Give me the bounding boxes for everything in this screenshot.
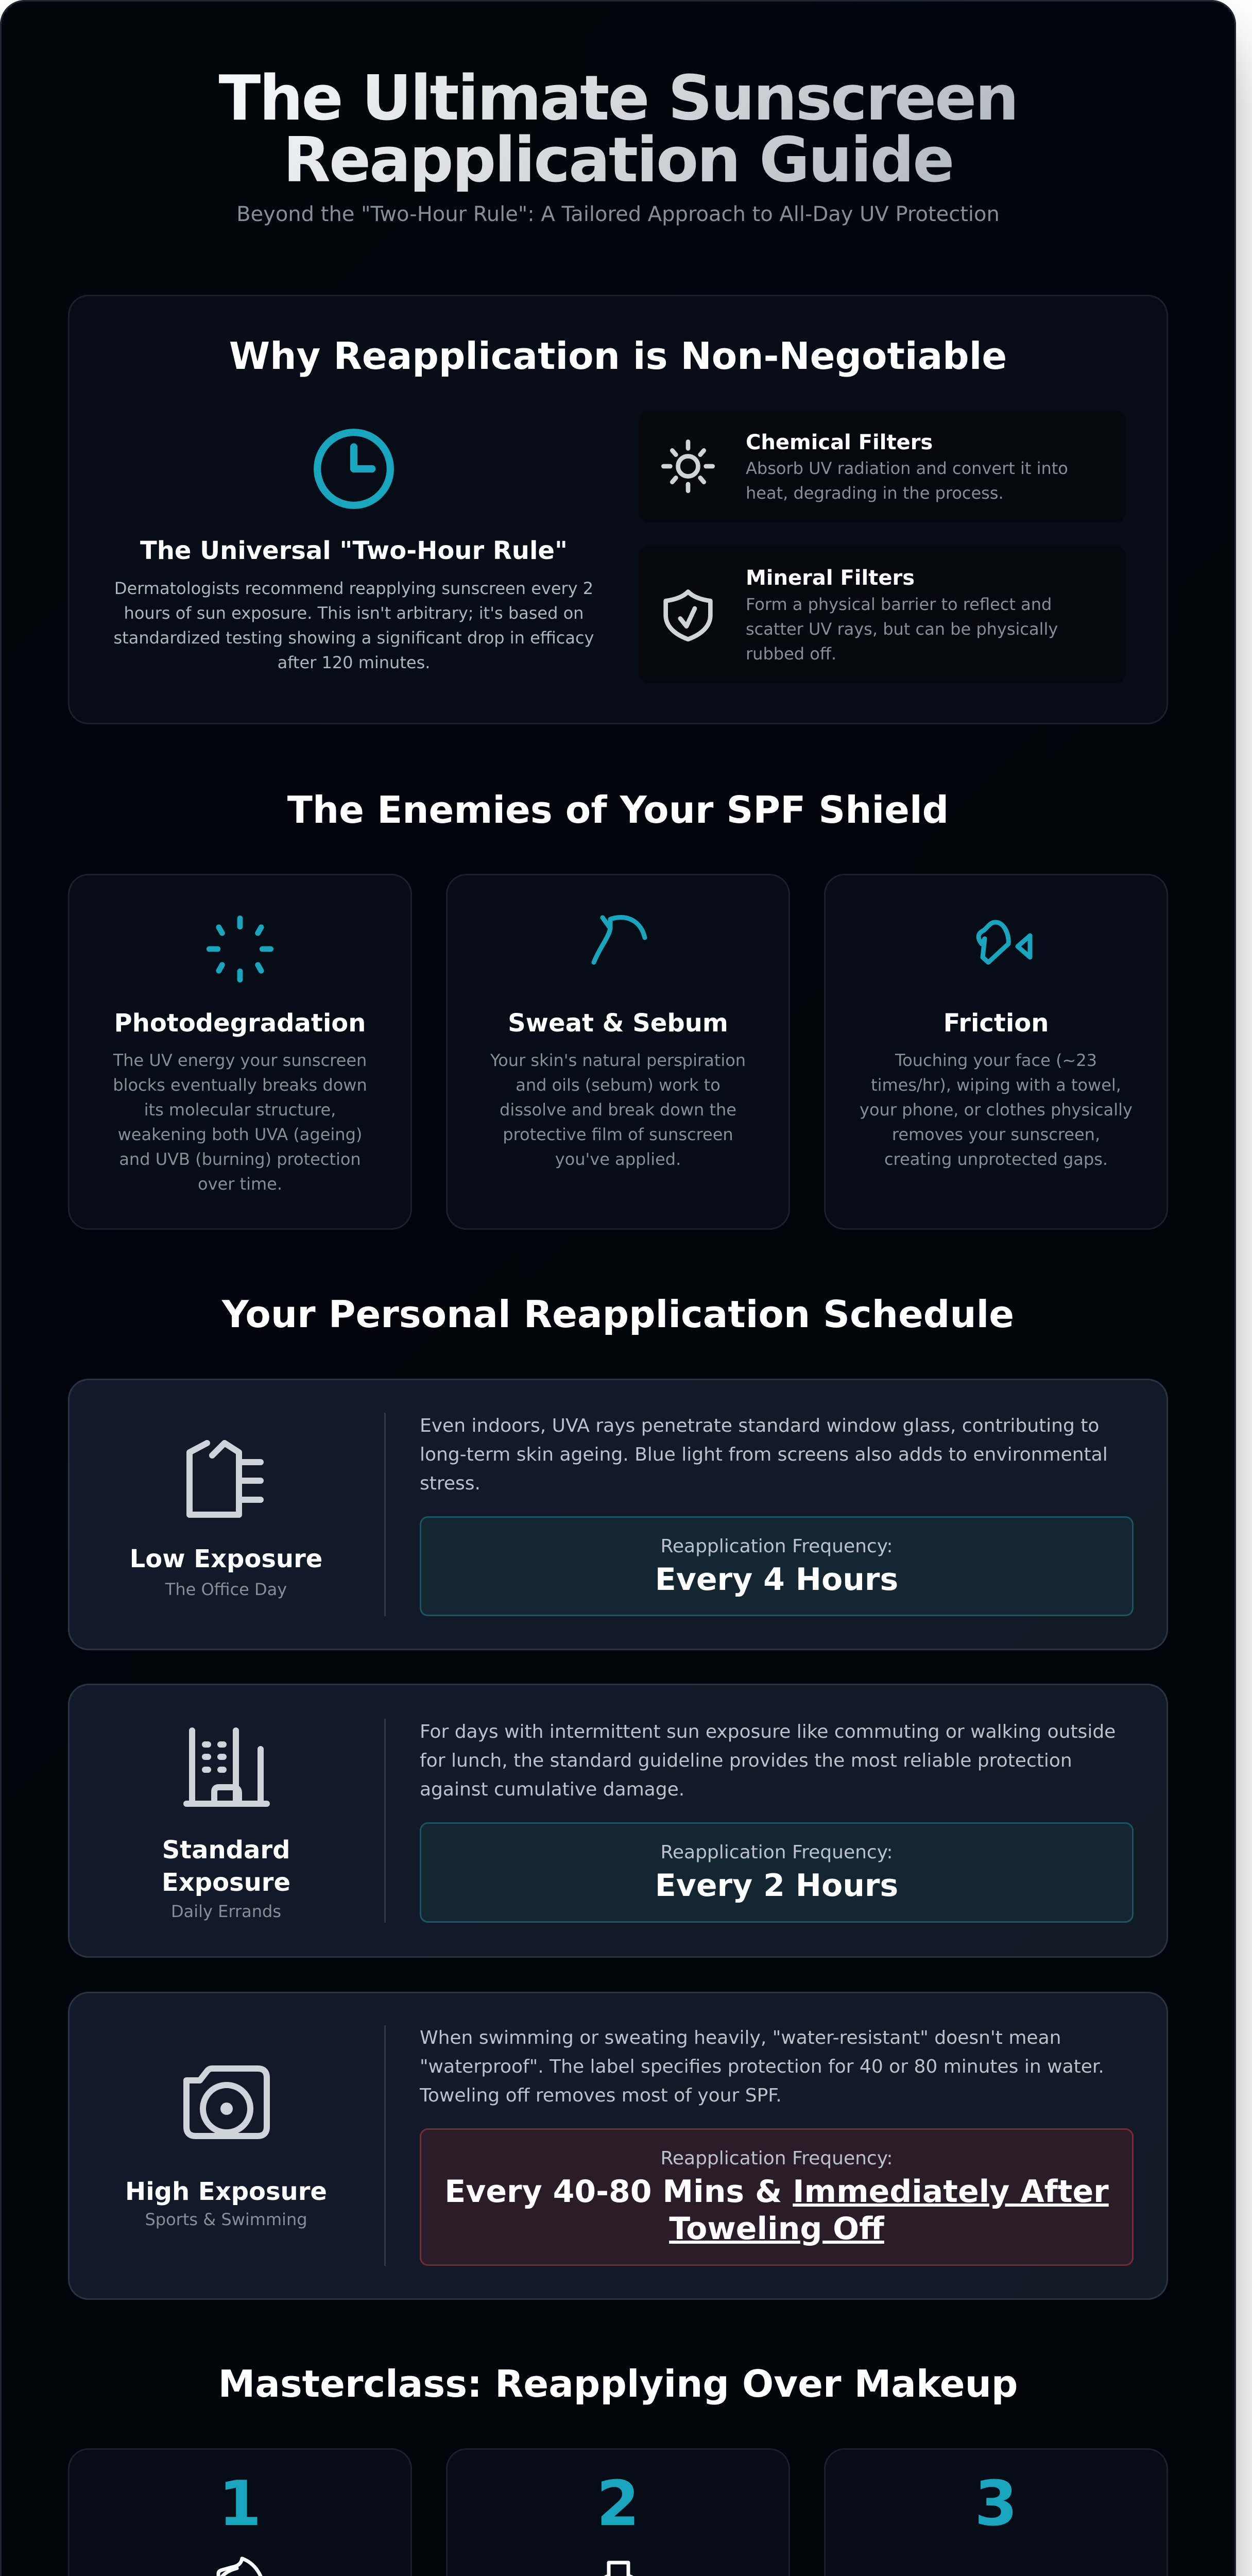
chemical filters text: Absorb UV radiation and convert it into [746,459,1068,478]
frequency label: Reapplication Frequency: [660,2147,893,2169]
title: The Ultimate Sunscreen [219,63,1017,134]
panel: step 1 [68,2448,412,2576]
chemical filters text: heat, degrading in the process. [746,483,1004,503]
friction text: times/hr), wiping with a towel, [871,1075,1121,1095]
two-hour rule text: after 120 minutes. [278,653,430,672]
title [206,68,1030,192]
photodegradation text: and UVB (burning) protection [119,1149,361,1169]
panel: step 3 [824,2448,1168,2576]
heading: why reapplication: Why Reapplication is Non-Negotiable [229,334,1007,378]
high exposure text: "waterproof". The label specifies protection for 40 or 80 minutes in water. [420,2056,1104,2077]
friction text: Touching your face (~23 [895,1050,1097,1070]
low exposure title: Low Exposure [130,1545,322,1573]
sweat title: Sweat & Sebum [508,1009,728,1038]
high exposure text: Toweling off removes most of your SPF. [420,2084,782,2106]
divider [384,1413,386,1616]
frequency value: Every 40-80 Mins & Immediately After [444,2174,1109,2210]
panel: step 2 [446,2448,790,2576]
standard exposure subtitle: Daily Errands [171,1902,281,1921]
icon: buildings [183,1727,270,1807]
mineral filters text: Form a physical barrier to reflect and [746,595,1052,614]
icon: friction [976,920,1032,964]
high exposure title: High Exposure [125,2177,327,2206]
icon: sun rays [207,916,273,982]
photodegradation text: weakening both UVA (ageing) [118,1125,362,1144]
friction text: creating unprotected gaps. [884,1149,1108,1169]
photodegradation text: The UV energy your sunscreen [113,1050,367,1070]
icon: blot [216,2556,263,2576]
photodegradation text [113,1050,367,1194]
frequency box: 40-80 mins [420,2128,1134,2266]
sweat text: you've applied. [555,1149,681,1169]
frequency box: every 2 hours [420,1822,1134,1923]
frequency label: Reapplication Frequency: [660,1842,893,1863]
box: mineral filters [639,546,1126,683]
two-hour rule text: Dermatologists recommend reapplying sunscreen every 2 [114,579,593,598]
chemical filters title: Chemical Filters [746,431,933,454]
frequency value: Every 2 Hours [655,1868,898,1904]
mineral filters title: Mineral Filters [746,566,915,590]
step number: 1 [218,2468,262,2540]
divider [384,1719,386,1923]
two-hour rule text: hours of sun exposure. This isn't arbitrary; it's based on [124,603,584,623]
heading: enemies: The Enemies of Your SPF Shield [287,788,949,832]
icon: bottle [604,2561,633,2576]
frequency label: Reapplication Frequency: [660,1536,893,1557]
box: chemical filters [639,411,1126,522]
icon: camera [183,2065,270,2139]
step number: 3 [974,2468,1018,2540]
low exposure text: Even indoors, UVA rays penetrate standard window glass, contributing to [420,1415,1099,1436]
photodegradation text: blocks eventually breaks down [113,1075,367,1095]
icon: clock [314,429,394,509]
mineral filters text: rubbed off. [746,644,836,664]
panel: sweat and sebum [446,874,790,1230]
mineral filters text: scatter UV rays, but can be physically [746,619,1058,639]
two-hour rule heading: The Universal "Two-Hour Rule" [140,536,568,565]
high exposure subtitle: Sports & Swimming [145,2210,307,2229]
friction text [860,1050,1133,1169]
standard exposure text: for lunch, the standard guideline provides the most reliable protection [420,1750,1072,1771]
panel: low exposure [68,1379,1168,1650]
standard exposure title: Standard [162,1836,290,1865]
mineral filters text [746,595,1058,664]
title: Reapplication Guide [283,125,953,196]
chemical filters text [746,459,1068,503]
sweat text: Your skin's natural perspiration [490,1050,746,1070]
frequency value: Toweling Off [669,2211,884,2247]
heading: schedule: Your Personal Reapplication Schedule [222,1293,1014,1336]
panel: high exposure [68,1992,1168,2300]
panel: standard exposure [68,1684,1168,1958]
step number: 2 [596,2468,640,2540]
low exposure subtitle: The Office Day [165,1580,287,1599]
photodegradation text: its molecular structure, [144,1100,336,1120]
icon: office [186,1440,264,1518]
frequency value: Every 4 Hours [655,1562,898,1598]
sweat text [490,1050,746,1169]
friction text: your phone, or clothes physically [860,1100,1133,1120]
friction title: Friction [944,1009,1049,1038]
icon: shield [663,589,713,642]
low exposure text: stress. [420,1473,481,1494]
standard exposure text: against cumulative damage. [420,1779,684,1800]
frequency value [444,2174,1109,2247]
photodegradation text: over time. [198,1174,282,1194]
heading: masterclass: Masterclass: Reapplying Over Makeup [218,2362,1018,2405]
panel: why reapplication [68,295,1168,724]
sweat text: dissolve and break down the [500,1100,736,1120]
low exposure text [420,1415,1108,1494]
panel: friction [824,874,1168,1230]
photodegradation title: Photodegradation [114,1009,366,1038]
sweat text: protective film of sunscreen [503,1125,733,1144]
frequency box: every 4 hours [420,1516,1134,1616]
icon: sweat [591,915,647,964]
subtitle: Beyond the "Two-Hour Rule": A Tailored Approach to All-Day UV Protection [236,202,1000,226]
panel: photodegradation [68,874,412,1230]
low exposure text: long-term skin ageing. Blue light from screens also adds to environmental [420,1444,1108,1465]
standard exposure title: Exposure [162,1868,290,1897]
standard exposure title [162,1836,290,1897]
friction text: removes your sunscreen, [892,1125,1100,1144]
divider [384,2025,386,2266]
icon: sun [661,439,715,493]
high exposure text [419,2027,1104,2106]
two-hour rule text: standardized testing showing a significant drop in efficacy [113,628,594,648]
sweat text: and oils (sebum) work to [516,1075,721,1095]
high exposure text: When swimming or sweating heavily, "water-resistant" doesn't mean [420,2027,1061,2048]
two-hour rule text [113,579,594,672]
standard exposure text: For days with intermittent sun exposure like commuting or walking outside [420,1721,1116,1742]
standard exposure text [420,1721,1116,1800]
